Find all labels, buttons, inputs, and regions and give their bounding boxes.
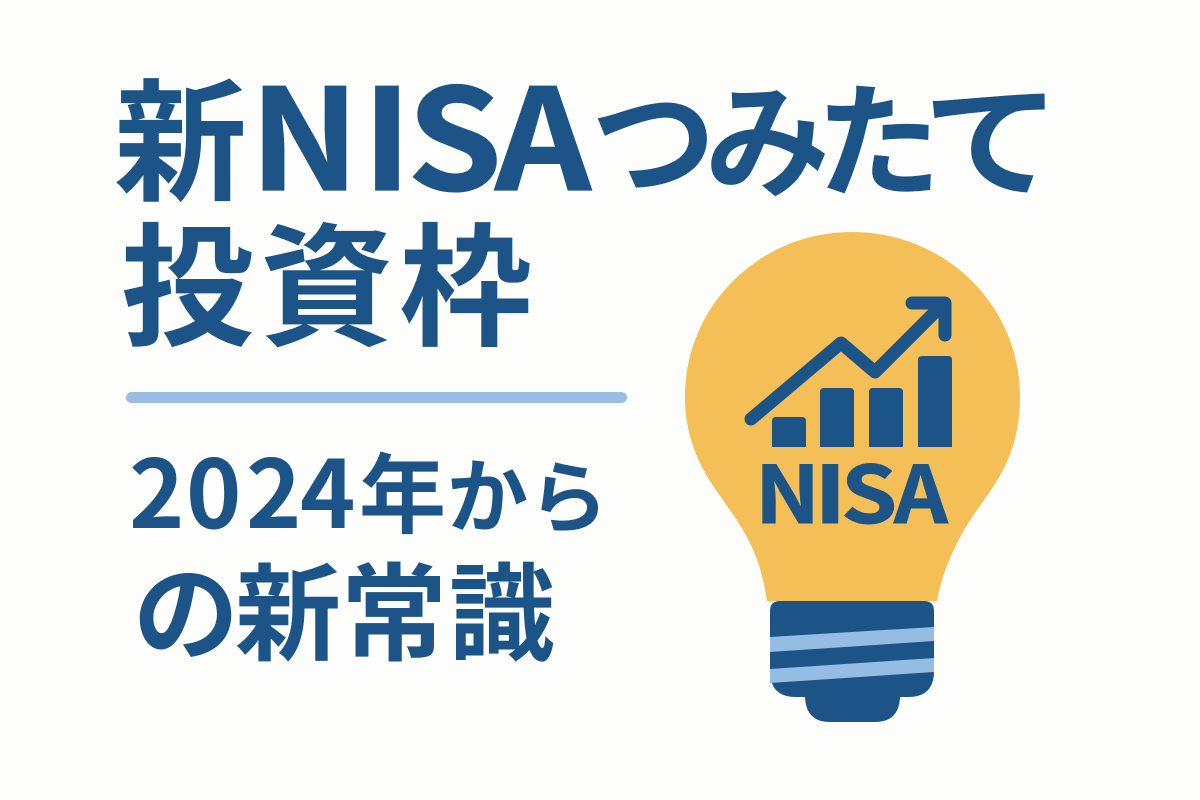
subtitle line 2: の [133, 529, 239, 683]
subtitle line 1: 2 [129, 420, 184, 556]
subtitle line 1: か [447, 433, 528, 550]
NISA label: A [893, 433, 949, 546]
subtitle line 1: 0 [186, 420, 241, 556]
trend arrow [751, 303, 945, 419]
NISA label: I [814, 431, 847, 546]
bar chart [772, 356, 952, 447]
subtitle line 1 [129, 420, 608, 556]
NISA label: N [755, 432, 820, 546]
title line 1: A [494, 28, 592, 231]
divider [126, 392, 627, 403]
title line 1: た [816, 42, 941, 223]
title line 2: 資 [260, 182, 393, 374]
base stripe 2 [770, 658, 934, 683]
title [114, 28, 1060, 374]
title line 1: み [705, 42, 830, 223]
title line 2: 枠 [399, 182, 532, 374]
base stripe 1 [770, 627, 934, 652]
subtitle line 1: 2 [246, 420, 301, 556]
title line 1: N [250, 28, 359, 231]
title line 1 [114, 28, 1060, 231]
subtitle line 2: 常 [341, 529, 447, 683]
bulb base [770, 601, 934, 722]
subtitle line 1: ら [529, 434, 608, 549]
title line 1: 新 [114, 37, 247, 229]
subtitle line 2: 新 [235, 529, 341, 683]
title line 1: S [407, 28, 502, 231]
subtitle line 2: 識 [449, 529, 555, 683]
NISA label [755, 431, 949, 546]
title line 1: て [923, 42, 1060, 223]
subtitle [129, 420, 608, 683]
NISA label: S [841, 433, 897, 546]
title line 1: I [362, 28, 412, 230]
subtitle line 1: 年 [359, 426, 446, 552]
icon: light bulb [685, 232, 1020, 722]
title line 1: つ [591, 42, 716, 223]
bulb glass [685, 232, 1020, 601]
title line 2: 投 [121, 182, 254, 374]
subtitle line 1: 4 [300, 420, 355, 556]
